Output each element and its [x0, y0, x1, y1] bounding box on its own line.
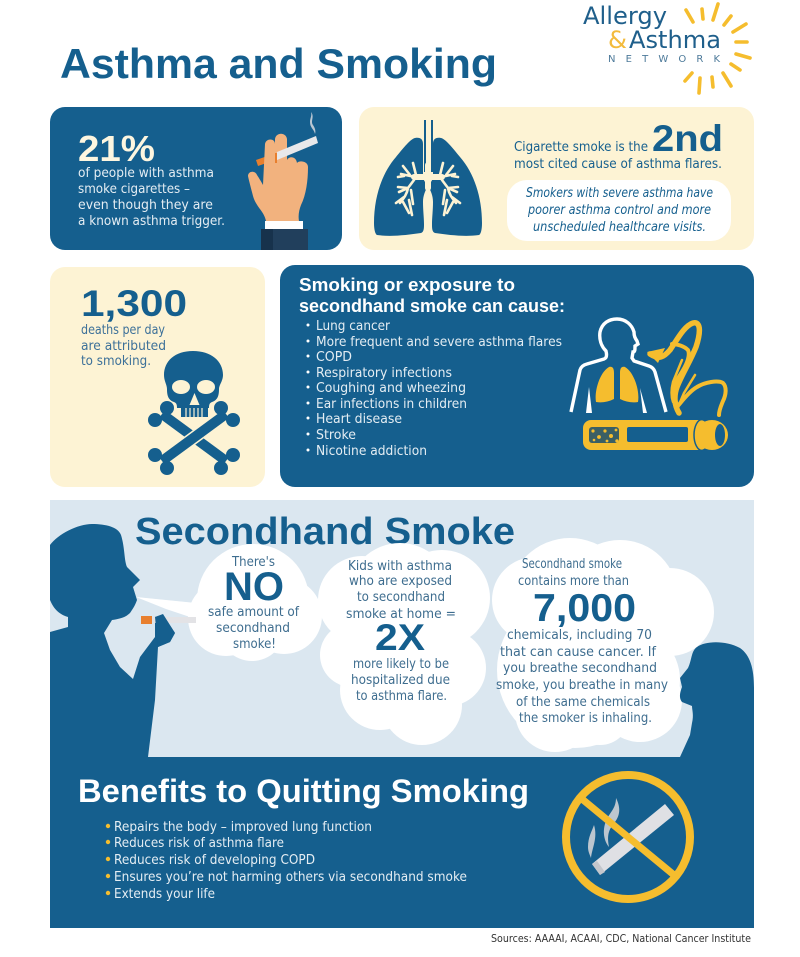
list: health effects: [306, 318, 562, 459]
icon: person with lungs and cigarette smoke: [571, 319, 728, 450]
panel: 21% smokers: [50, 107, 342, 250]
text block: most cited cause: [514, 118, 723, 172]
sources: Sources: AAAAI, ACAAI, CDC, National Cancer Institute: [491, 933, 751, 945]
text block: deaths per day: are attributed: [81, 338, 166, 354]
text block: kids 2X: who are exposed: [349, 573, 452, 589]
text block: smokers description: a known asthma trigger.: [78, 213, 225, 229]
callout: severe asthma: [507, 180, 731, 241]
icon: no smoking sign: [566, 775, 690, 899]
text block: deaths per day: [81, 322, 166, 369]
text block: no safe amount: secondhand: [216, 620, 290, 636]
text block: no safe amount: safe amount of: [208, 604, 300, 620]
list: benefits: Extends your life: [114, 886, 215, 902]
callout: severe asthma: unscheduled healthcare visits.: [533, 220, 706, 235]
title: Asthma and Smoking: [60, 40, 497, 87]
text block: smokers description: even though they are: [78, 197, 213, 213]
list: health effects: COPD: [316, 349, 352, 365]
list: health effects: Ear infections in children: [316, 396, 467, 412]
panel: benefits to quitting: [50, 757, 754, 928]
heading: Secondhand Smoke: Secondhand Smoke: [135, 511, 515, 553]
text block: 7,000 chemicals: smoke, you breathe in many: [496, 677, 668, 693]
list: health effects: More frequent and severe asthma flares: [316, 334, 562, 350]
text block: most cited cause: 2nd: [652, 118, 723, 159]
text block: 7,000 chemicals: you breathe secondhand: [503, 660, 657, 676]
heading: Benefits to Quitting Smoking: Benefits to Quitting Smoking: [78, 773, 529, 809]
icon: hand holding cigarette: [248, 112, 318, 250]
heading: smoking can cause: secondhand smoke can cause:: [299, 296, 565, 316]
text block: 7,000 chemicals: the smoker is inhaling.: [519, 710, 652, 726]
list: benefits: Reduces risk of developing COPD: [114, 852, 315, 868]
text block: smokers description: of people with asthma: [78, 165, 214, 181]
list: benefits: Repairs the body – improved lung function: [114, 819, 372, 835]
text block: kids 2X: more likely to be: [353, 656, 449, 672]
text block: smokers description: [78, 165, 225, 229]
text block: kids 2X: to secondhand: [357, 589, 445, 605]
text block: kids 2X: hospitalized due: [351, 672, 450, 688]
logo: Allergy & Asthma Network: NETWORK: [608, 54, 720, 65]
text block: kids 2X: to asthma flare.: [356, 688, 447, 704]
logo: Allergy & Asthma Network: Asthma: [629, 26, 721, 54]
heading: smoking can cause: [299, 275, 565, 316]
illustration: smoke clouds: [136, 538, 714, 752]
heading: smoking can cause: Smoking or exposure to: [299, 275, 515, 295]
text block: most cited cause: most cited cause of asthma flares.: [514, 156, 722, 172]
callout: severe asthma: Smokers with severe asthma have: [526, 186, 713, 201]
text block: no safe amount: [208, 554, 300, 652]
text block: kids 2X: 2X: [375, 617, 425, 658]
text block: 7,000 chemicals: Secondhand smoke: [522, 556, 622, 572]
text block: most cited cause: Cigarette smoke is the: [514, 139, 648, 155]
text block: 7,000 chemicals: [496, 556, 668, 726]
text block: 7,000 chemicals: chemicals, including 70: [507, 627, 652, 643]
text block: 7,000 chemicals: that can cause cancer. If: [500, 644, 657, 660]
panel: 1,300 deaths: [50, 267, 265, 487]
stat: 21%: 21%: [78, 128, 155, 169]
panel: secondhand smoke background: [50, 500, 754, 758]
logo: Allergy & Asthma Network: &: [608, 26, 627, 54]
illustration: smoker silhouette: [50, 524, 175, 757]
list: benefits: Ensures you’re not harming others via secondhand smoke: [114, 869, 467, 885]
list: health effects: Coughing and wheezing: [316, 380, 466, 396]
stat: 1,300: 1,300: [81, 283, 187, 324]
list: health effects: Nicotine addiction: [316, 443, 427, 459]
text block: no safe amount: NO: [224, 565, 284, 609]
list: health effects: Lung cancer: [316, 318, 390, 334]
text block: no safe amount: smoke!: [233, 636, 276, 652]
list: benefits: Reduces risk of asthma flare: [114, 835, 284, 851]
logo: Allergy & Asthma Network: Allergy: [583, 2, 667, 30]
panel: health effects: [280, 265, 754, 487]
icon: held cigarette: [141, 614, 196, 647]
text block: kids 2X: [346, 558, 456, 704]
text block: deaths per day: deaths per day: [81, 322, 165, 338]
text block: kids 2X: Kids with asthma: [348, 558, 452, 574]
icon: skull and crossbones: [148, 351, 240, 475]
callout: severe asthma: poorer asthma control and more: [527, 203, 711, 218]
list: health effects: Heart disease: [316, 411, 402, 427]
text block: no safe amount: There's: [231, 554, 275, 570]
text block: kids 2X: smoke at home =: [346, 606, 456, 622]
list: benefits: [106, 819, 467, 902]
text block: 7,000 chemicals: of the same chemicals: [516, 694, 650, 710]
text block: 7,000 chemicals: contains more than: [518, 573, 629, 589]
text block: 7,000 chemicals: 7,000: [533, 587, 636, 630]
icon: lungs: [374, 120, 482, 236]
illustration: child silhouette: [680, 642, 754, 757]
logo: Allergy & Asthma Network: [583, 2, 750, 93]
text block: smokers description: smoke cigarettes –: [78, 181, 190, 197]
list: health effects: Stroke: [316, 427, 356, 443]
list: health effects: Respiratory infections: [316, 365, 452, 381]
text block: deaths per day: to smoking.: [81, 353, 151, 369]
panel: 2nd most cited cause: [359, 107, 754, 250]
